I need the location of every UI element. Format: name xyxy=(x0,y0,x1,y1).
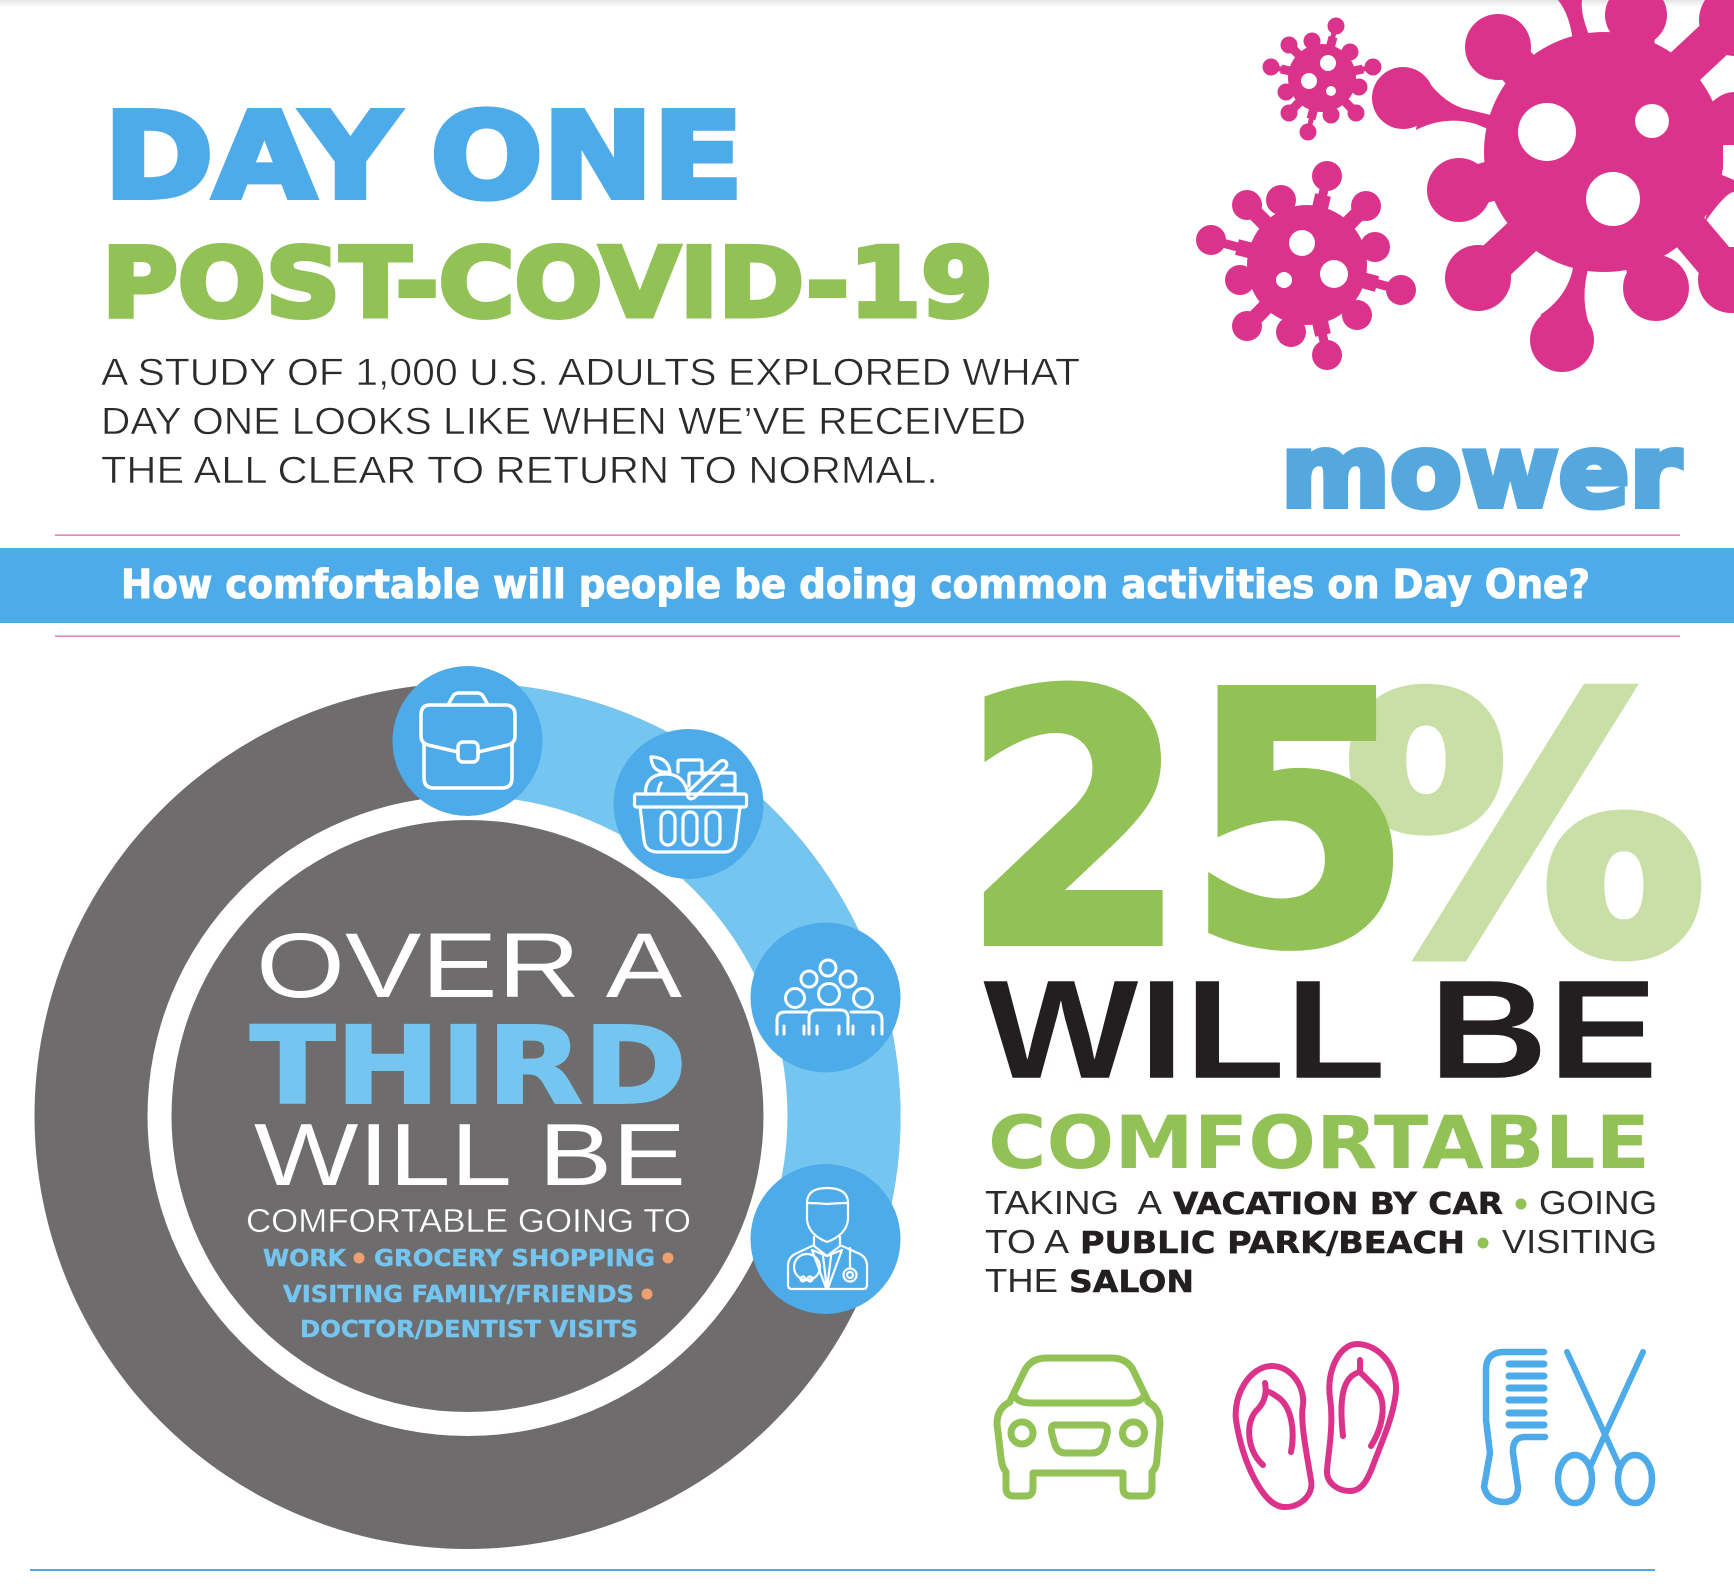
text: comfortable activities: THE xyxy=(985,1262,1058,1299)
text: comfortable activities: VISITING xyxy=(1502,1223,1657,1260)
logo: mower: mower xyxy=(1281,413,1682,530)
intro text: THE ALL CLEAR TO RETURN TO NORMAL. xyxy=(101,450,938,492)
text: comfortable activities: PUBLIC PARK/BEACH xyxy=(1080,1226,1465,1261)
text: activity list xyxy=(263,1246,674,1343)
text: comfortable going to: COMFORTABLE GOING TO xyxy=(246,1202,691,1239)
icon: doctor xyxy=(750,1164,900,1314)
icon: people xyxy=(750,922,900,1072)
text: percent sign: % xyxy=(1344,625,1706,1033)
icon: car xyxy=(997,1358,1160,1496)
text: activity list: DOCTOR/DENTIST VISITS xyxy=(300,1317,638,1343)
icon: briefcase xyxy=(392,666,542,816)
text: third: THIRD xyxy=(250,1005,687,1129)
icon: medium virus xyxy=(1196,161,1416,370)
banner heading: How comfortable will people be doing common activities on Day One? xyxy=(121,562,1590,608)
text: comfortable activities: VACATION BY CAR xyxy=(1173,1187,1503,1222)
text: activity list: WORK xyxy=(263,1246,347,1272)
text: comfortable activities: TAKING A xyxy=(985,1184,1162,1221)
text: will be: WILL BE xyxy=(983,950,1658,1108)
intro text: A STUDY OF 1,000 U.S. ADULTS EXPLORED WHAT xyxy=(101,352,1080,394)
text: over a: OVER A xyxy=(256,915,683,1017)
icon: flip flops xyxy=(1236,1344,1396,1507)
banner xyxy=(0,548,1734,623)
text: comfortable activities: SALON xyxy=(1069,1265,1194,1300)
icon: small virus xyxy=(1262,18,1382,140)
icon: comb and scissors xyxy=(1484,1352,1652,1503)
intro text: DAY ONE LOOKS LIKE WHEN WE’VE RECEIVED xyxy=(101,401,1026,443)
text: comfortable activities xyxy=(985,1184,1657,1300)
text: comfortable activities: TO A xyxy=(985,1223,1069,1260)
text: comfortable activities: GOING xyxy=(1539,1184,1657,1221)
icon: grocery basket xyxy=(614,729,764,879)
intro text xyxy=(101,352,1080,492)
text: activity list: VISITING FAMILY/FRIENDS xyxy=(283,1282,634,1308)
title: Day One: DAY ONE xyxy=(104,87,743,225)
text: will be: WILL BE xyxy=(254,1105,686,1204)
title: Post-COVID-19: POST-COVID-19 xyxy=(102,229,993,339)
icon: large virus xyxy=(1372,0,1734,372)
text: comfortable: COMFORTABLE xyxy=(988,1101,1650,1186)
stat: 25: 25 xyxy=(962,620,1412,1024)
text: activity list: GROCERY SHOPPING xyxy=(374,1246,655,1272)
panel: over a third ring xyxy=(34,666,901,1549)
